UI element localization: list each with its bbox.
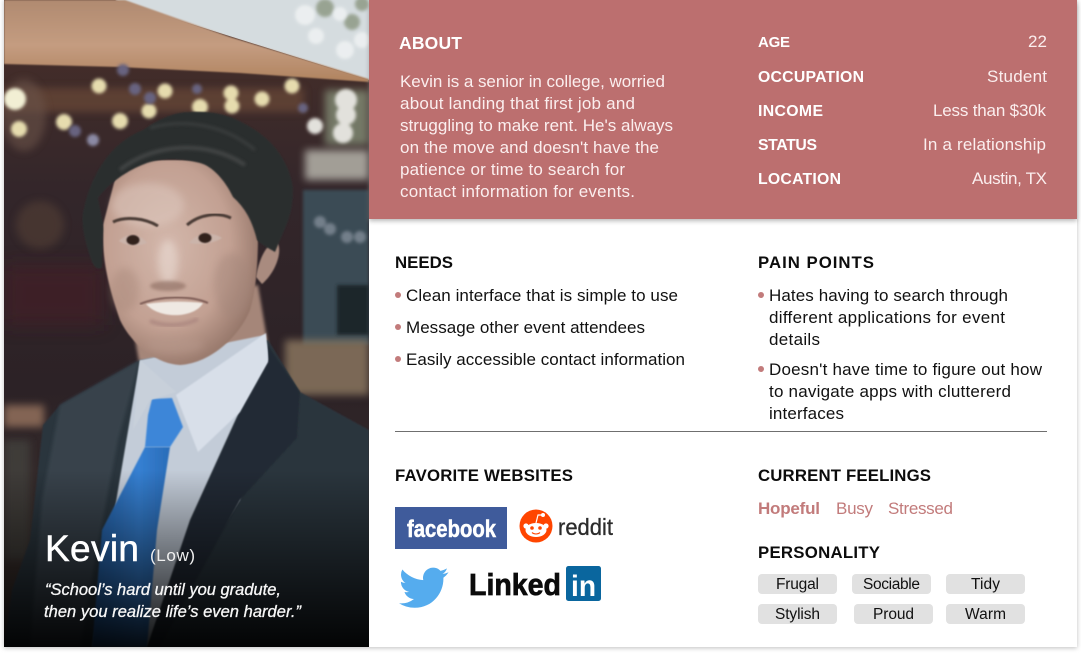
tag: sociable: Sociable (863, 576, 920, 593)
demographics: OCCUPATION (758, 69, 864, 86)
demographics: 22 (1028, 32, 1047, 51)
man: neck, jacket, shirt, tie, head (4, 112, 369, 647)
tag: proud (854, 604, 933, 624)
logo: reddit (520, 510, 614, 542)
pain points section: details (769, 330, 820, 349)
current feelings section: CURRENT FEELINGS (758, 466, 931, 485)
logo: linkedin: in (571, 570, 596, 603)
pain points section (758, 253, 1043, 423)
persona name (45, 528, 195, 569)
persona quote: “School’s hard until you gradute, (45, 581, 281, 599)
current feelings section: Busy (836, 499, 874, 518)
about section (399, 33, 673, 201)
about section: ABOUT (399, 33, 462, 53)
tag: warm (946, 604, 1025, 624)
tag: frugal: Frugal (776, 576, 819, 593)
favorite websites section: FAVORITE WEBSITES (395, 466, 573, 485)
tag: proud: Proud (873, 606, 914, 623)
personality section (758, 543, 1025, 624)
logo: reddit: reddit (558, 514, 614, 540)
demographics: Student (987, 67, 1047, 86)
about section: struggling to make rent. He's always (400, 116, 673, 135)
about section: Kevin is a senior in college, worried (400, 72, 665, 91)
needs section (395, 253, 685, 369)
personality section: PERSONALITY (758, 543, 880, 562)
panel: portrait photo (2, 0, 370, 647)
tag: sociable (852, 574, 931, 594)
face (103, 160, 258, 365)
logo: facebook (395, 507, 507, 549)
logo: twitter (399, 568, 448, 608)
about section: on the move and doesn't have the (400, 138, 659, 157)
band shadow (369, 4, 1077, 221)
pain points section: different applications for event (769, 308, 1005, 327)
demographics: LOCATION (758, 171, 841, 188)
demographics: Austin, TX (972, 169, 1047, 188)
photo bottom gradient (4, 470, 369, 647)
ear (256, 243, 279, 284)
tag: stylish (758, 604, 837, 624)
favorite websites section (395, 466, 614, 608)
shading (112, 183, 184, 227)
about section: patience or time to search for (400, 160, 625, 179)
demographics: STATUS (758, 137, 817, 154)
hair (82, 112, 293, 269)
current feelings section: Hopeful (758, 499, 820, 518)
tag: warm: Warm (965, 606, 1006, 623)
demographics: INCOME (758, 103, 823, 120)
tag: stylish: Stylish (775, 606, 820, 623)
tag: frugal (758, 574, 837, 594)
persona quote (44, 581, 302, 621)
eyes and brows (113, 215, 231, 226)
panel: about band (369, 0, 1077, 219)
persona name: Kevin (45, 528, 139, 569)
tag: tidy (946, 574, 1025, 594)
about section: about landing that first job and (400, 94, 635, 113)
needs section: Message other event attendees (406, 318, 645, 337)
pain points section: Hates having to search through (769, 286, 1008, 305)
demographics (758, 32, 1047, 188)
about section: contact information for events. (400, 182, 635, 201)
logo: facebook: facebook (407, 516, 497, 543)
mouth (146, 302, 203, 315)
demographics: AGE (758, 34, 790, 51)
needs section: NEEDS (395, 253, 453, 272)
persona quote: then you realize life’s even harder.” (44, 603, 302, 621)
current feelings section: Stressed (888, 499, 953, 518)
tag: tidy: Tidy (971, 576, 1000, 593)
pain points section: interfaces (769, 404, 844, 423)
needs section: Easily accessible contact information (406, 350, 685, 369)
roof (4, 0, 369, 82)
pain points section: to navigate apps with cluttererd (769, 382, 1011, 401)
persona name: (Low) (150, 546, 195, 565)
demographics: In a relationship (923, 135, 1046, 154)
logo: linkedin: Linked (469, 567, 561, 602)
pain points section: PAIN POINTS (758, 253, 874, 272)
current feelings section (758, 466, 953, 518)
needs section: Clean interface that is simple to use (406, 286, 678, 305)
pain points section: Doesn't have time to figure out how (769, 360, 1043, 379)
demographics: Less than $30k (933, 101, 1046, 120)
photo background (2, 0, 370, 647)
